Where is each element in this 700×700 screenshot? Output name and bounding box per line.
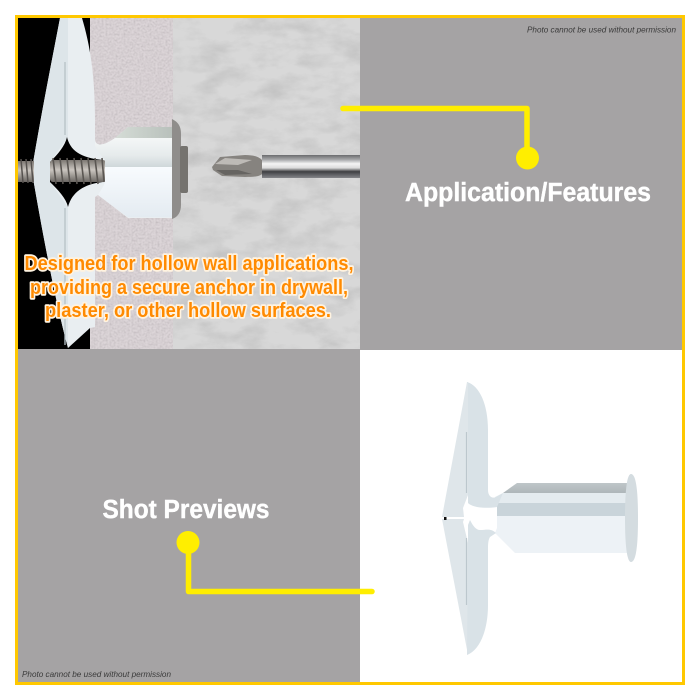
panel: application photo: [18, 18, 362, 349]
icon: washer: [172, 119, 188, 219]
black hollow around screw: [50, 137, 103, 207]
panel: product preview: [360, 350, 684, 683]
connector: application features: [343, 108, 539, 170]
sleeve upper shade: [503, 483, 627, 493]
flange: [625, 474, 638, 562]
upper wing strip: [467, 382, 503, 508]
slot lines: [466, 432, 468, 605]
concrete wall surface: [173, 18, 360, 349]
watermark top right: Photo cannot be used without permission: [527, 24, 676, 34]
sleeve upper band: [495, 493, 627, 503]
panel: bottom left grey: [18, 349, 360, 683]
text line 2: providing a secure anchor in drywall,: [30, 277, 348, 299]
black cavity: [18, 18, 93, 349]
description text: [24, 253, 354, 322]
heading: shot previews: Shot Previews: [102, 496, 270, 524]
sleeve lower body: [495, 516, 627, 553]
upper wing face: [442, 382, 468, 517]
watermark bottom left: Photo cannot be used without permission: [22, 669, 171, 679]
heading: application features: Application/Features: [405, 179, 651, 207]
icon: screw thread rear: [18, 159, 34, 183]
icon: screwdriver: [212, 155, 362, 178]
text line 3: plaster, or other hollow surfaces.: [45, 300, 331, 322]
icon: anchor toggle wings: [33, 18, 173, 348]
lower wing strip: [467, 520, 496, 655]
icon: anchor product shot: [442, 382, 638, 655]
icon: screw thread front: [50, 158, 106, 184]
panel: top right grey: [360, 18, 684, 350]
text line 1: Designed for hollow wall applications,: [24, 253, 354, 275]
lower wing face: [442, 519, 468, 655]
connector: shot previews: [176, 531, 372, 592]
centre hinge: [444, 517, 446, 520]
plaster wall section: [90, 18, 173, 349]
icon: anchor sleeve: [95, 127, 172, 196]
